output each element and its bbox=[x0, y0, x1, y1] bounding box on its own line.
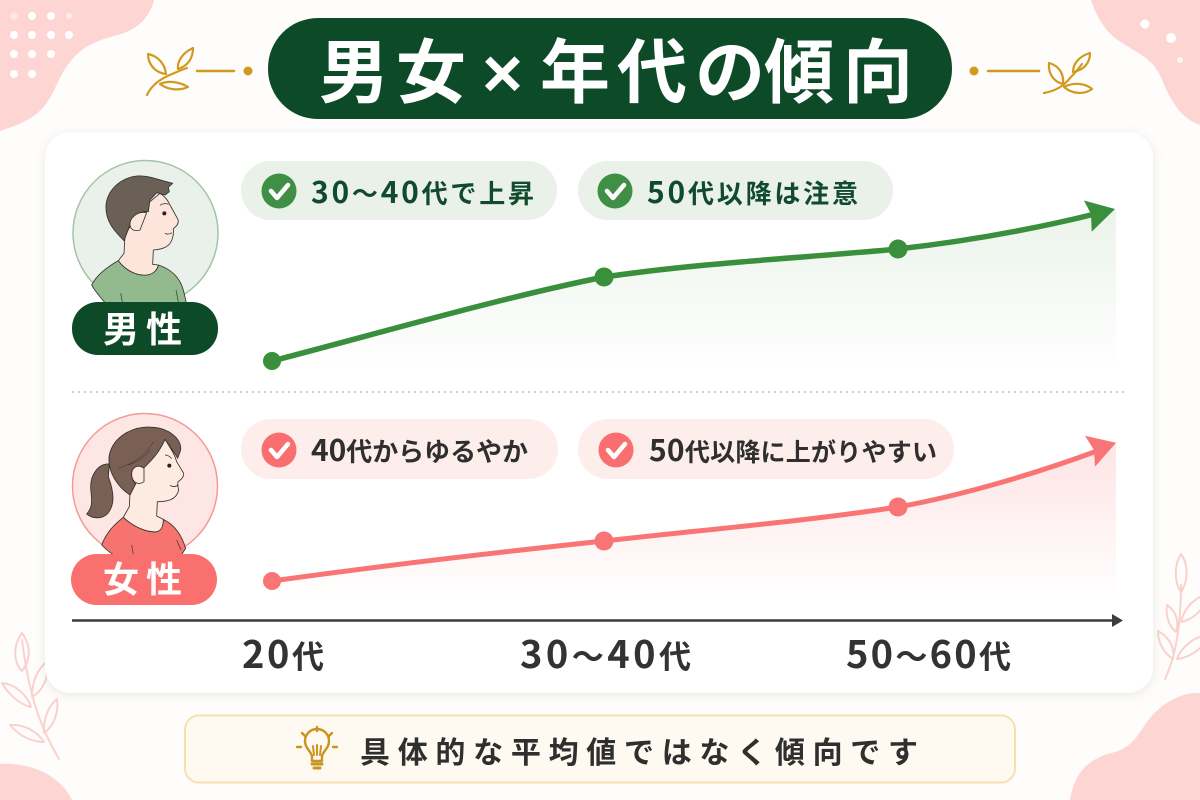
x axis arrow bbox=[72, 614, 1123, 627]
label: man bbox=[72, 301, 218, 355]
pill: women 40 bbox=[241, 419, 558, 479]
dots: top right bbox=[1140, 20, 1183, 63]
note box bbox=[185, 716, 1015, 782]
pill: men 50+ bbox=[578, 161, 893, 220]
icon: light bulb bbox=[297, 727, 337, 768]
axis label: 50〜60代: 50～60代 bbox=[846, 624, 1011, 679]
chart: men bbox=[263, 200, 1116, 372]
dots: top left bbox=[10, 12, 73, 78]
avatar: woman bbox=[72, 414, 218, 558]
divider bbox=[72, 391, 1125, 393]
axis label: 30〜40代: 30～40代 bbox=[520, 624, 691, 679]
label: woman: 女性 bbox=[103, 551, 182, 603]
label: man: 男性 bbox=[103, 301, 182, 353]
pill: women 50+ bbox=[578, 419, 954, 479]
title: 男女×年代の傾向 bbox=[319, 34, 913, 112]
axis label: 20代: 20代 bbox=[242, 624, 324, 679]
ornament: title left bbox=[147, 48, 252, 95]
blob: bottom right bbox=[1070, 693, 1200, 800]
pill: men 30-40: 30～40代で上昇 bbox=[311, 168, 534, 212]
blob: top left bbox=[0, 0, 154, 131]
pill: men 30-40 bbox=[241, 161, 557, 220]
main panel bbox=[45, 132, 1153, 693]
ornament: title right bbox=[970, 53, 1092, 93]
blob: top right bbox=[1091, 0, 1200, 125]
label: woman bbox=[71, 551, 217, 605]
avatar: man bbox=[73, 160, 218, 306]
note box: 具体的な平均値ではなく傾向です bbox=[360, 728, 918, 772]
pill: women 40: 40代からゆるやか bbox=[311, 426, 528, 470]
chart: women bbox=[263, 436, 1116, 602]
pill: women 50+: 50代以降に上がりやすい bbox=[649, 426, 937, 470]
leaf sprig: bottom right bbox=[1158, 554, 1200, 679]
leaf sprig: bottom left bbox=[2, 633, 59, 759]
pill: men 50+: 50代以降は注意 bbox=[647, 168, 858, 212]
blob: bottom left bbox=[0, 764, 72, 800]
title bbox=[268, 18, 952, 119]
